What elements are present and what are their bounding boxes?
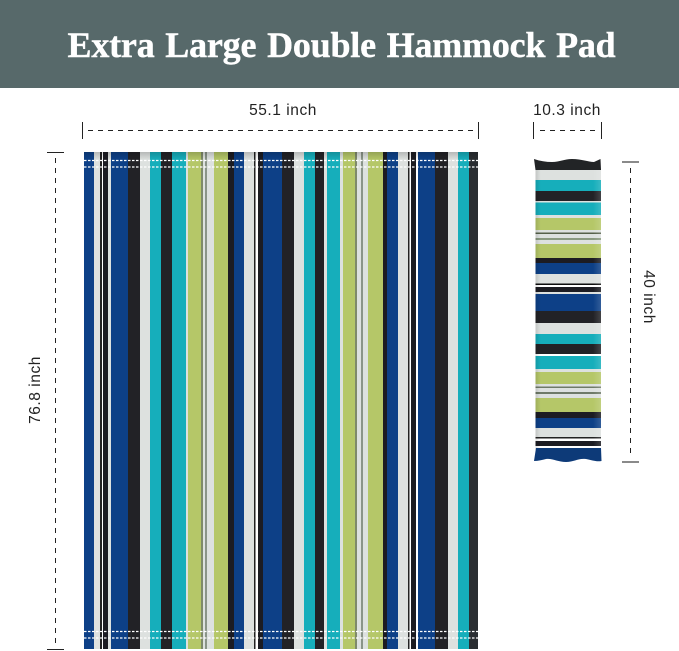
height dimension: 76.8 inch [27, 152, 64, 650]
top cap [534, 159, 601, 170]
bottom cap [534, 448, 602, 462]
height dimension: 76.8 inch: 76.8 inch [27, 356, 44, 424]
large striped pad [84, 150, 480, 651]
height dimension: 40 inch: 40 inch [640, 270, 657, 324]
rolled striped pad [534, 159, 602, 462]
width dimension: 55.1 inch: 55.1 inch [249, 102, 317, 119]
height dimension: 40 inch [622, 162, 657, 462]
header banner [0, 0, 679, 88]
width dimension: 10.3 inch [533, 102, 602, 139]
width dimension: 10.3 inch: 10.3 inch [533, 102, 601, 119]
width dimension: 55.1 inch [82, 102, 478, 139]
title: Extra Large Double Hammock Pad [68, 25, 615, 65]
